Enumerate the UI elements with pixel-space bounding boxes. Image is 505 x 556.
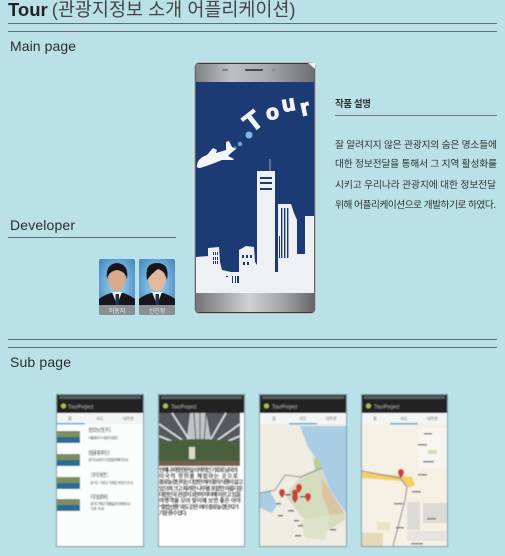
screenshot 3: map: 홈 xyxy=(272,415,276,421)
airplane xyxy=(197,141,236,168)
screenshot 2: detail: TourProject xyxy=(171,404,197,410)
detail text: "종합선물"과도 같은 여러 종로농경단지가 xyxy=(159,503,239,511)
heading: main page: Main page xyxy=(10,38,76,54)
screenshot 4: zoomed map: 내주변 xyxy=(426,415,438,421)
detail text: 언제나 따뜻한온실 이색적인 기후로 남국의 xyxy=(159,466,238,474)
heading: sub page: Sub page xyxy=(10,354,71,370)
dotted trail xyxy=(230,132,252,151)
screenshot 2: detail xyxy=(158,394,245,547)
description text: 시키고 우리나라 관광지에 대한 정보전달 xyxy=(335,179,496,191)
description panel xyxy=(335,98,497,211)
screenshot 3: map xyxy=(259,394,347,547)
list text: 서울 종로구 시설 안내 정보 xyxy=(88,435,119,440)
list text: 동물테마파크 xyxy=(88,449,110,457)
greenhouse photo xyxy=(159,413,240,466)
list text: 경기도 남양주시 진접읍 부평리 안내 xyxy=(88,457,128,462)
detail text: 대한민국 관광지 3천여 미터에 이르고 있음 xyxy=(159,490,241,498)
list text: 가평 축제 xyxy=(90,506,104,511)
phone mockup xyxy=(194,62,316,314)
description heading: 작품 설명 xyxy=(335,98,371,110)
tour logo: r xyxy=(298,94,312,121)
detail text: 여행객을 모아 맞이해 보면 좋은 아마 xyxy=(159,496,242,504)
tour logo: o xyxy=(264,100,280,125)
list text: 경기도 가평군 가평읍 복장리 안내 xyxy=(90,480,133,485)
list thumbnails xyxy=(57,431,80,511)
screenshot 3: map: 지도 xyxy=(299,415,307,421)
tour logo: u xyxy=(280,90,297,117)
list text: 경기도 가평군 가평읍 달전리 축제 안내 xyxy=(90,501,130,506)
list text: 자라섬축제 xyxy=(90,493,108,501)
map pins xyxy=(279,484,311,503)
detail text xyxy=(159,466,243,517)
city skyline xyxy=(196,171,314,293)
map labels xyxy=(276,494,336,536)
screenshot 3: map: 내주변 xyxy=(325,415,337,421)
detail text: 종로농경단지는 다양한 여러 종의 식물이 살고 xyxy=(159,478,243,486)
screenshot 1: list: 홈 xyxy=(68,415,72,421)
detail text: 이국적 정취를 체험하는 곳으로 xyxy=(159,472,238,480)
description text xyxy=(335,139,497,211)
map pin xyxy=(398,469,404,478)
roads and blocks xyxy=(362,472,415,488)
detail text: 기운 줄 수 있다. xyxy=(159,509,187,517)
tour logo: T xyxy=(237,104,268,138)
screenshot 4: zoomed map: TourProject xyxy=(374,404,400,410)
sea and land xyxy=(300,426,346,513)
screenshot 3: map: TourProject xyxy=(272,404,298,410)
app screen xyxy=(196,82,314,293)
screenshot 1: list: 내주변 xyxy=(122,415,134,421)
description text: 대한 정보전달을 통해서 그 지역 활성화를 xyxy=(335,157,497,170)
developer photo 2: 신인정 xyxy=(149,307,165,315)
heading: developer: Developer xyxy=(10,217,75,233)
screenshot 4: zoomed map: 지도 xyxy=(400,415,408,421)
description text: 잘 알려지지 않은 관광지의 숨은 명소들에 xyxy=(335,139,497,151)
screenshot 1: list: TourProject xyxy=(68,404,94,410)
developer photo 2 xyxy=(139,259,175,315)
screenshot 4: zoomed map: 홈 xyxy=(373,415,377,421)
list text xyxy=(88,426,133,511)
screenshot 4: zoomed map xyxy=(361,394,448,547)
screenshot 1: list xyxy=(56,394,144,547)
description text: 위해 어플리케이션으로 개발하기로 하였다. xyxy=(335,198,496,211)
list text: 종로농경단지 xyxy=(88,426,111,434)
tour logo xyxy=(237,90,312,138)
screenshot 1: list: 지도 xyxy=(96,415,104,421)
detail text: 있으며 크고 화려한 나무를 포함한 아름다운 xyxy=(159,484,243,492)
developer photo 1 xyxy=(99,259,135,315)
map labels xyxy=(394,433,436,544)
developer photo 1: 허동지 xyxy=(109,307,125,315)
list text: 코리아랜드 xyxy=(90,471,109,479)
